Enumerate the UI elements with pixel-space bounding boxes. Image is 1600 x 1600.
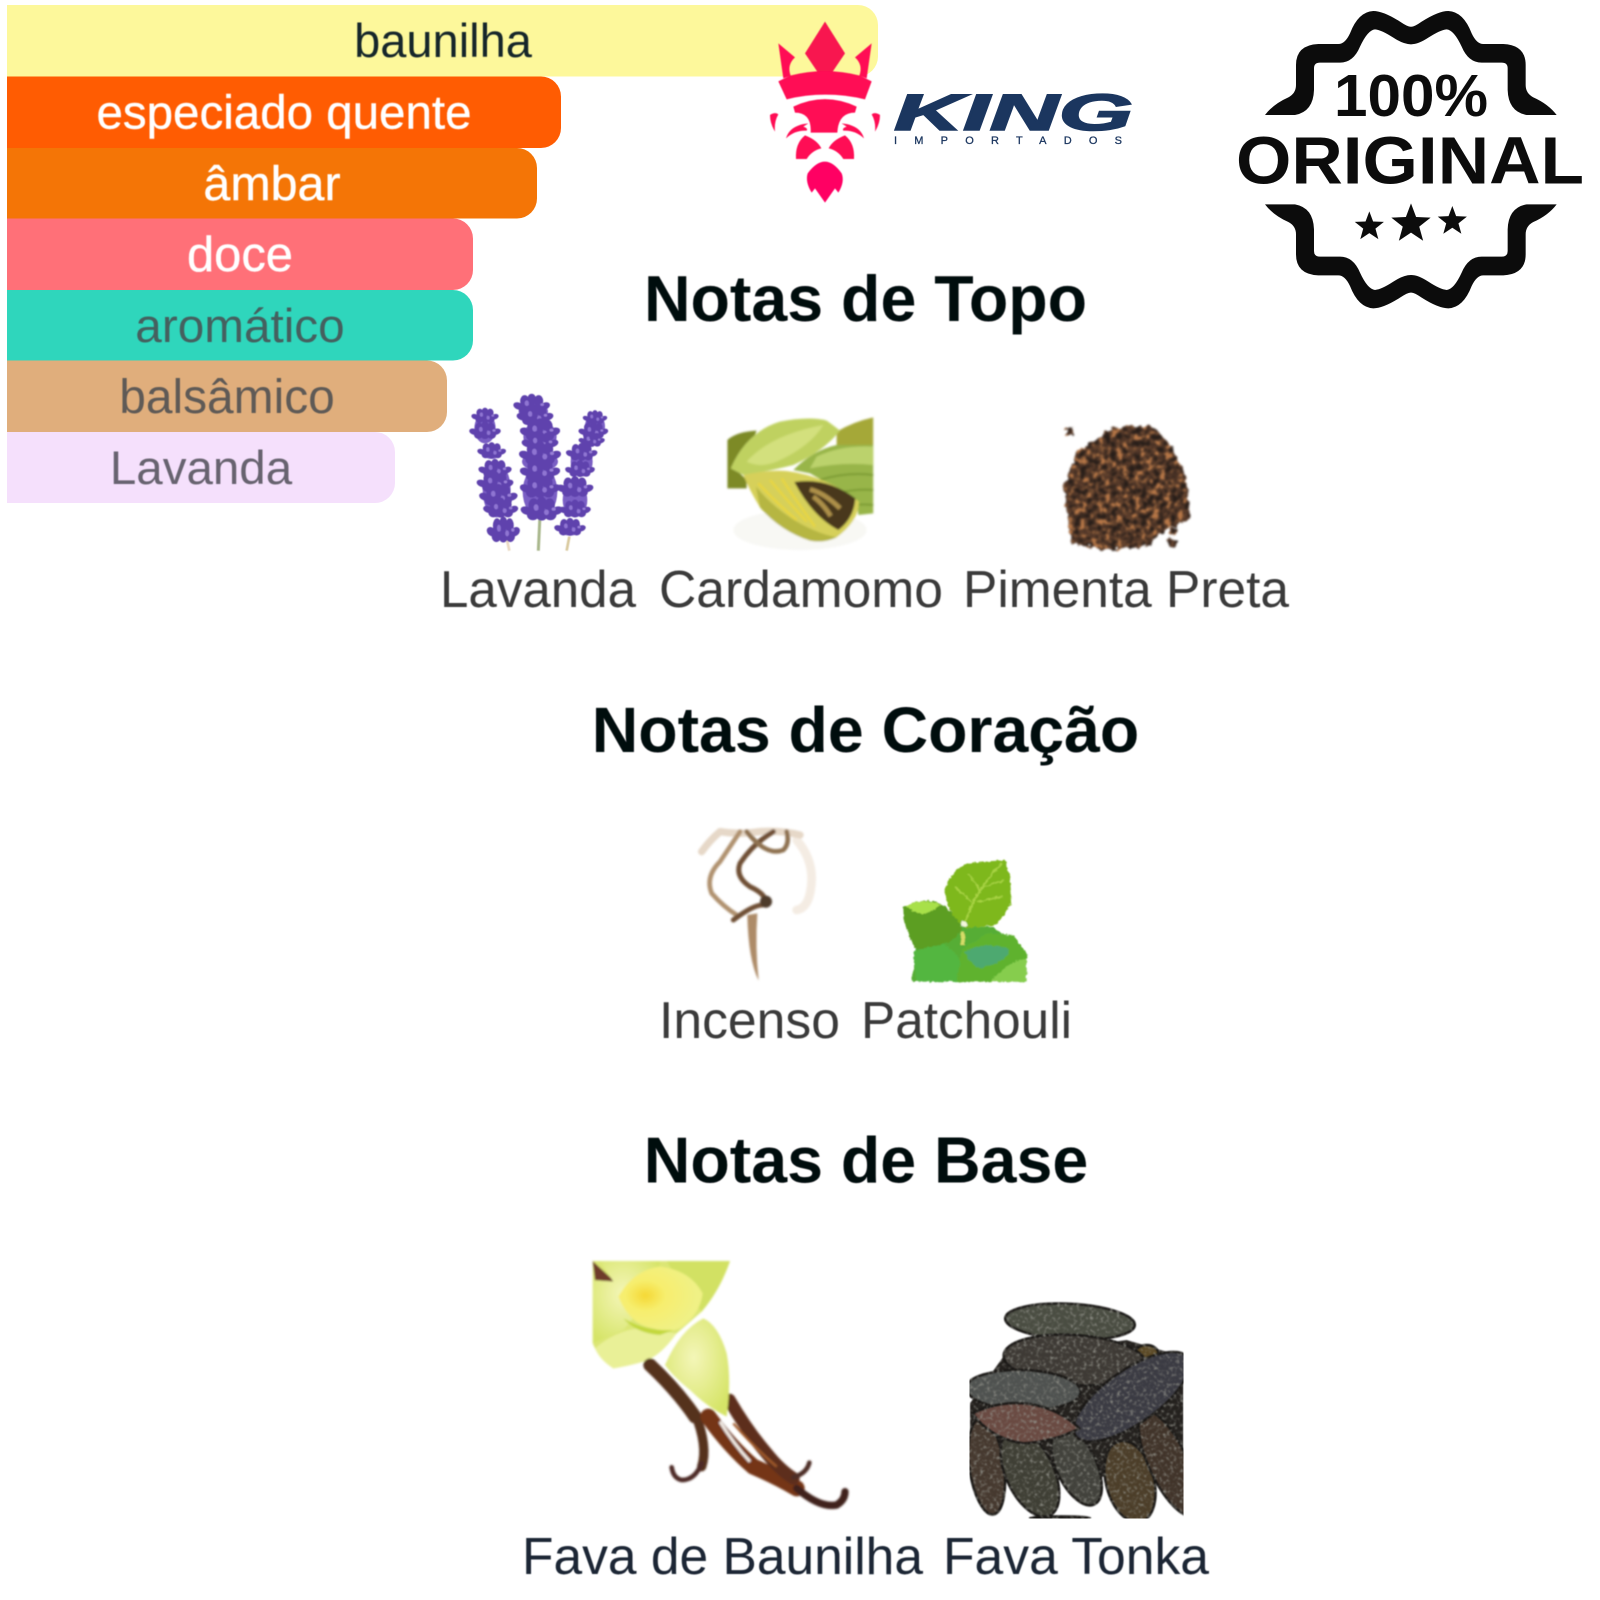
bar: Lavanda: Lavanda — [110, 442, 293, 495]
icon: tonka beans — [970, 1301, 1184, 1518]
bar: âmbar — [7, 148, 537, 218]
section: base notes — [522, 1124, 1210, 1586]
wordmark: IMPORTADOS: IMPORTADOS — [894, 135, 1122, 147]
badge text: 100%: 100% — [1334, 63, 1488, 129]
label: Incenso: Incenso — [659, 992, 840, 1050]
bar: baunilha: baunilha — [354, 14, 533, 67]
bar: aromático: aromático — [135, 300, 345, 353]
heading: Notas de Base: Notas de Base — [644, 1124, 1088, 1196]
icon: patchouli leaves — [903, 860, 1027, 983]
wordmark: KING: KING — [894, 84, 1133, 141]
label: Pimenta Preta: Pimenta Preta — [963, 561, 1289, 619]
bar: doce: doce — [187, 228, 293, 282]
panel: scent accord bars — [7, 5, 878, 503]
label: Fava de Baunilha: Fava de Baunilha — [522, 1528, 923, 1586]
icon: cardamom pods — [727, 417, 873, 550]
label: Patchouli: Patchouli — [861, 992, 1072, 1050]
logo: King Importados — [770, 22, 1133, 203]
bar: doce — [7, 218, 473, 290]
heading: Notas de Coração: Notas de Coração — [592, 694, 1139, 766]
label: Fava Tonka: Fava Tonka — [943, 1528, 1209, 1586]
section: top notes — [440, 263, 1289, 619]
bar: baunilha — [7, 5, 878, 76]
bar: Lavanda — [7, 432, 395, 503]
label: Lavanda: Lavanda — [440, 561, 636, 619]
heading: Notas de Topo: Notas de Topo — [644, 263, 1087, 335]
bar: especiado quente — [7, 76, 561, 148]
icon: lavender — [468, 394, 609, 551]
badge ribbon and stars — [1265, 11, 1557, 308]
section: heart notes — [592, 694, 1139, 1050]
icon: black pepper — [1063, 425, 1190, 550]
label: Cardamomo: Cardamomo — [659, 561, 943, 619]
badge text: ORIGINAL: ORIGINAL — [1236, 124, 1584, 198]
bar: balsâmico — [7, 360, 447, 432]
icon: crowned lion — [770, 22, 880, 203]
bar: âmbar: âmbar — [203, 157, 341, 211]
badge: 100% original — [1236, 11, 1584, 308]
icon: vanilla flower and pods — [593, 1261, 845, 1505]
bar: aromático — [7, 290, 473, 360]
icon: incense smoke — [702, 831, 812, 981]
bar: balsâmico: balsâmico — [119, 371, 335, 424]
bar: especiado quente: especiado quente — [96, 86, 472, 140]
